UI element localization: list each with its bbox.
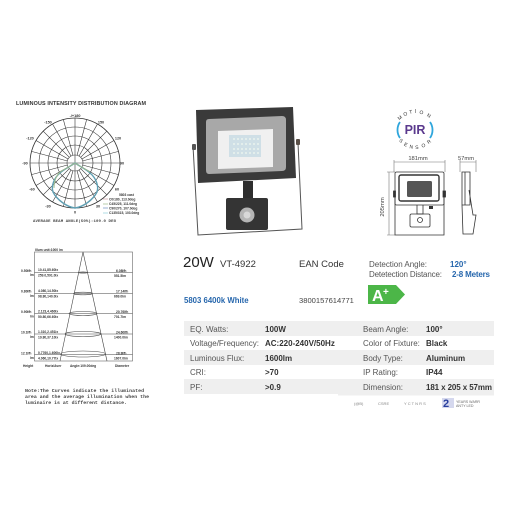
specification table: 1600lm xyxy=(265,354,292,363)
polar intensity chart: -60 xyxy=(29,188,35,192)
PIR motion sensor badge: R xyxy=(426,139,433,146)
polar intensity chart: 90 xyxy=(120,162,124,166)
polar intensity chart: -150 xyxy=(44,120,52,124)
dimension drawing: 205mm xyxy=(380,197,386,217)
PIR motion sensor badge xyxy=(397,109,433,151)
illuminance cone diagram: 4.060,10.77lx xyxy=(38,356,58,360)
illuminance cone diagram: 10.1lfh xyxy=(21,330,31,334)
polar intensity chart: -90 xyxy=(22,162,28,166)
polar intensity chart: 60 xyxy=(115,188,119,192)
polar intensity chart: 0 xyxy=(74,210,76,214)
specification table: IP Rating: xyxy=(363,368,398,377)
illuminance cone diagram: 12.1lfh xyxy=(21,352,31,356)
illuminance cone diagram: lm xyxy=(30,273,34,277)
specification table: Aluminum xyxy=(426,354,465,363)
illuminance cone diagram: 0.90lfh xyxy=(21,310,31,314)
polar intensity chart xyxy=(22,114,124,214)
illuminance cone diagram: 17.14lfh xyxy=(116,290,128,294)
illuminance cone diagram: 98.80,140.0lx xyxy=(38,294,58,298)
floodlight product photo xyxy=(192,107,302,235)
specification table: Luminous Flux: xyxy=(190,354,244,363)
polar intensity chart: -/+180 xyxy=(70,114,80,118)
note text: Note:The Curves indicate the illuminated xyxy=(25,388,144,394)
specification table: IP44 xyxy=(426,368,443,377)
illuminance cone diagram: Diameter xyxy=(115,364,130,368)
illuminance cone diagram: 1607.0lm xyxy=(114,356,128,360)
illuminance cone diagram: 551.5lm xyxy=(114,274,126,278)
detection specs: Detetection Distance: xyxy=(369,270,442,279)
specification table: 100° xyxy=(426,325,443,334)
specification table: >70 xyxy=(265,368,279,377)
detection specs: 120° xyxy=(450,260,467,269)
illuminance cone diagram: lm xyxy=(30,314,34,318)
specification table: AC:220-240V/50Hz xyxy=(265,339,335,348)
certification logos: Y C T N R S xyxy=(404,401,426,406)
model heading xyxy=(183,254,344,271)
certification logos: YEARS WARR xyxy=(456,400,480,404)
detection specs: 2-8 Meters xyxy=(452,270,491,279)
polar intensity chart: 150 xyxy=(98,120,104,124)
illuminance cone diagram: Height xyxy=(23,364,34,368)
dimension drawing: 57mm xyxy=(458,156,474,162)
SKU label: 5803 6400k White xyxy=(184,296,249,305)
specification table: >0.9 xyxy=(265,383,281,392)
specification table: EQ. Watts: xyxy=(190,325,228,334)
illuminance cone diagram: 4.080,14.50lx xyxy=(38,289,58,293)
polar chart legend: C135/315, 103.0deg xyxy=(109,211,139,215)
PIR motion sensor badge: S xyxy=(397,138,404,145)
illuminance cone diagram: 50.80,66.60lx xyxy=(38,315,58,319)
polar intensity chart: -120 xyxy=(26,136,34,140)
dimension drawing: 181mm xyxy=(408,156,428,162)
illuminance cone diagram: Angle:109.00deg xyxy=(70,364,96,368)
certification logos: (@B) xyxy=(354,401,364,406)
illuminance cone diagram: 0.80lfh xyxy=(21,290,31,294)
dimension drawing xyxy=(380,156,476,235)
energy rating arrow: A xyxy=(372,288,384,305)
illuminance cone diagram: 669.0lm xyxy=(114,294,126,298)
specification table: Color of Fixture: xyxy=(363,339,420,348)
illuminance cone diagram: 28.8lfh xyxy=(116,352,126,356)
illuminance cone diagram: Illum unit:1000 lm xyxy=(35,248,63,252)
polar chart legend: C90/270, 107.0deg xyxy=(109,206,137,210)
PIR motion sensor badge: E xyxy=(403,142,409,149)
polar chart legend: 5803 cast xyxy=(119,193,135,197)
illuminance cone diagram: 6.08lfh xyxy=(116,269,126,273)
note text: luminaire is at different distance. xyxy=(25,400,127,406)
illuminance cone diagram: lm xyxy=(30,294,34,298)
note text xyxy=(25,388,149,406)
PIR motion sensor badge: O xyxy=(403,111,409,118)
PIR motion sensor badge: M xyxy=(397,115,404,122)
certification logos xyxy=(338,394,494,410)
specification table: 181 x 205 x 57mm xyxy=(426,383,492,392)
illuminance cone diagram: 0.50lfh xyxy=(21,269,31,273)
polar chart legend: C45/225, 111.0deg xyxy=(109,202,137,206)
specification table: CRI: xyxy=(190,368,206,377)
specification table: 100W xyxy=(265,325,286,334)
beam angle caption: AVERAGE BEAM ANGLE(50%):109.0 DEG xyxy=(33,219,117,224)
illuminance cone diagram: 10.41,85.60lx xyxy=(38,268,58,272)
note text: area and the average illumination when the xyxy=(25,394,149,400)
illuminance cone diagram xyxy=(21,248,132,368)
illuminance cone diagram: lm xyxy=(30,335,34,339)
illuminance cone diagram: 2.123,4.460lx xyxy=(38,310,58,314)
energy rating arrow xyxy=(368,285,405,305)
illuminance cone diagram: lm xyxy=(30,356,34,360)
polar chart legend xyxy=(103,193,139,215)
specification table: Beam Angle: xyxy=(363,325,408,334)
polar chart legend: C0/180, 113.0deg xyxy=(109,198,135,202)
specification table: Body Type: xyxy=(363,354,403,363)
illuminance cone diagram: 20.76lfh xyxy=(116,310,128,314)
specification table: PF: xyxy=(190,383,202,392)
specification table: Voltage/Frequency: xyxy=(190,339,259,348)
illuminance cone diagram: 701.7lm xyxy=(114,315,126,319)
certification logos: ANTY LED xyxy=(456,404,474,408)
model heading: VT-4922 xyxy=(220,259,256,270)
illuminance cone diagram: 259.0,591.0lx xyxy=(38,274,58,278)
certification logos: CSRE xyxy=(378,401,389,406)
specification table: Black xyxy=(426,339,448,348)
specification table: Dimension: xyxy=(363,383,403,392)
illuminance cone diagram: 1400.0lm xyxy=(114,336,128,340)
PIR motion sensor badge: N xyxy=(425,113,432,120)
PIR motion sensor badge: N xyxy=(409,144,414,151)
model heading: 20W xyxy=(183,254,215,271)
PIR motion sensor badge: O xyxy=(421,143,427,150)
PIR motion sensor badge: T xyxy=(409,109,413,116)
illuminance cone diagram: 1.310,2.451lx xyxy=(38,330,58,334)
polar intensity chart: 30 xyxy=(96,204,100,208)
model heading: EAN Code xyxy=(299,259,344,270)
PIR motion sensor badge: O xyxy=(419,110,424,116)
illuminance cone diagram: 0.7760,1.600lx xyxy=(38,351,60,355)
energy rating arrow: + xyxy=(383,287,389,298)
illuminance cone diagram: 24.60lfh xyxy=(116,330,128,334)
specification table xyxy=(184,321,494,394)
PIR motion sensor badge: PIR xyxy=(405,123,425,137)
PIR motion sensor badge: I xyxy=(415,109,416,115)
certification logos: 2 xyxy=(443,398,449,410)
PIR motion sensor badge: S xyxy=(415,145,420,151)
illuminance cone diagram: 19.80,37.10lx xyxy=(38,336,58,340)
polar intensity chart: -30 xyxy=(45,204,51,208)
EAN number: 3800157614771 xyxy=(299,296,354,305)
detection specs: Detection Angle: xyxy=(369,260,427,269)
detection specs xyxy=(369,260,491,279)
illuminance cone diagram: Horiz/Aver xyxy=(45,364,62,368)
polar intensity chart: 120 xyxy=(115,136,121,140)
polar chart title: LUMINOUS INTENSITY DISTRIBUTION DIAGRAM xyxy=(16,101,146,107)
